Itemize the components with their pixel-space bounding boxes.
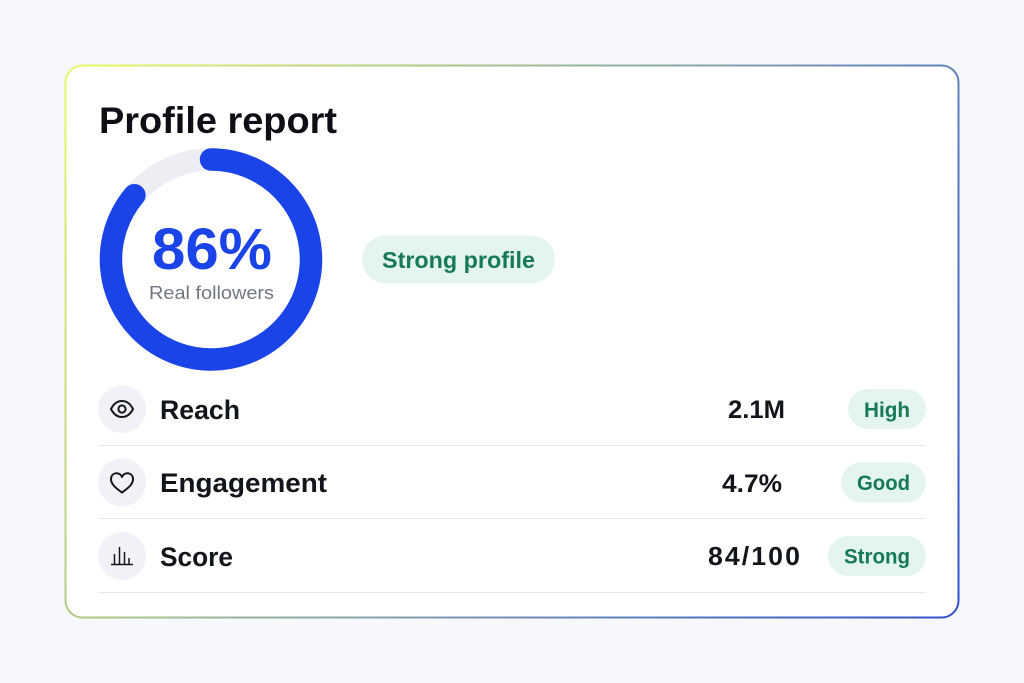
badge: strong profile: Strong profile <box>382 247 535 273</box>
badge: good <box>841 462 926 502</box>
value: score: 84/100 <box>708 541 802 571</box>
label: score: Score <box>160 542 233 572</box>
donut chart: 86% real followers <box>111 160 311 360</box>
icon: heart <box>98 458 146 506</box>
badge: high: High <box>864 399 910 422</box>
row: engagement <box>98 458 926 506</box>
title: Profile report <box>99 100 337 141</box>
label: engagement: Engagement <box>160 468 327 498</box>
icon: bar chart <box>98 532 146 580</box>
value: reach: 2.1M <box>728 396 785 424</box>
panel: profile report card <box>66 66 958 618</box>
badge: strong: Strong <box>844 546 910 568</box>
badge: good: Good <box>857 472 910 495</box>
donut value: 86% <box>152 217 272 282</box>
donut caption: Real followers <box>149 283 274 303</box>
value: engagement: 4.7% <box>722 470 782 498</box>
label: reach: Reach <box>160 395 240 425</box>
icon: eye <box>98 385 146 433</box>
badge: strong <box>828 536 926 576</box>
badge: strong profile <box>362 236 555 284</box>
row: score <box>98 532 926 580</box>
row: reach <box>98 385 926 433</box>
badge: high <box>848 389 926 429</box>
